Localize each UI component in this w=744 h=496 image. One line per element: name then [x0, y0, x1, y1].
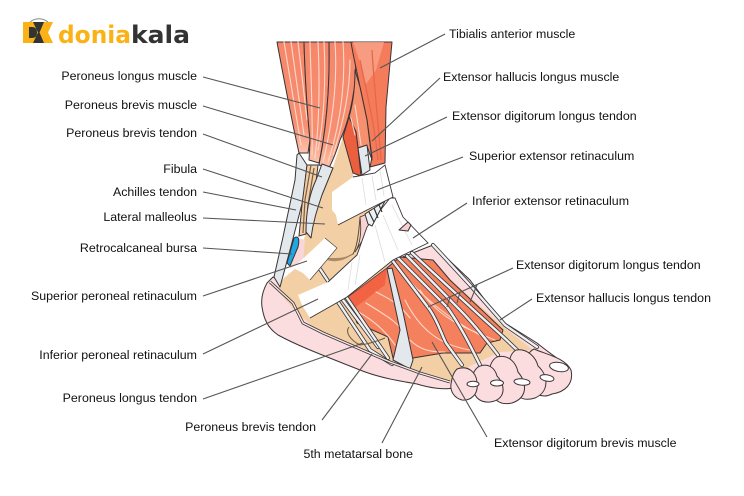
toes — [451, 349, 572, 404]
forefoot extensor tendons — [386, 245, 537, 365]
left labels — [31, 69, 422, 461]
toenails — [549, 361, 569, 373]
label: Inferior extensor retinaculum: Inferior extensor retinaculum — [472, 194, 629, 208]
label: Achilles tendon — [113, 185, 296, 210]
label: Fibula — [163, 162, 323, 208]
foot and ankle illustration — [31, 27, 711, 461]
label: Peroneus longus muscle — [61, 69, 320, 108]
label: Retrocalcaneal bursa: Retrocalcaneal bursa — [80, 241, 197, 255]
label: Extensor hallucis longus tendon: Extensor hallucis longus tendon — [536, 291, 711, 305]
label: Extensor digitorum longus tendon forefoot: Extensor digitorum longus tendon — [516, 258, 701, 272]
superior extensor retinaculum — [332, 165, 393, 225]
pink skin base of foot — [262, 245, 570, 389]
label: Extensor digitorum brevis muscle: Extensor digitorum brevis muscle — [494, 436, 677, 450]
pink sliver beside talus — [355, 212, 372, 252]
label: Peroneus brevis tendon lower: Peroneus brevis tendon — [185, 420, 316, 434]
label: 5th metatarsal bone: 5th metatarsal bone — [303, 447, 413, 461]
label: Lateral malleolus — [103, 210, 325, 224]
logo — [23, 19, 190, 49]
label: Peroneus brevis tendon: Peroneus brevis tendon — [66, 126, 197, 140]
label: 5th metatarsal bone — [303, 367, 422, 461]
deep red muscle — [343, 117, 361, 176]
label: Fibula: Fibula — [163, 162, 197, 176]
label: Achilles tendon: Achilles tendon — [113, 185, 197, 199]
label: Peroneus brevis muscle — [65, 98, 333, 145]
label: Peroneus longus muscle: Peroneus longus muscle — [61, 69, 197, 83]
extensor digitorum longus muscle — [349, 70, 372, 160]
little toe — [451, 368, 477, 400]
label: Tibialis anterior muscle — [380, 27, 575, 68]
label: Inferior peroneal retinaculum — [39, 299, 318, 362]
retrocalcaneal bursa — [287, 237, 299, 266]
label: Extensor hallucis longus muscle: Extensor hallucis longus muscle — [443, 70, 619, 84]
tan bone layer — [277, 137, 533, 381]
ankle gap tendons — [365, 201, 385, 226]
grey tendon wedge — [387, 268, 413, 369]
second toe — [509, 350, 546, 399]
logo: kala — [131, 21, 190, 49]
label: Tibialis anterior muscle: Tibialis anterior muscle — [449, 27, 575, 41]
right labels — [365, 27, 711, 450]
label: Peroneus longus tendon — [63, 343, 363, 405]
peroneal tendon bundle behind ankle — [299, 165, 318, 236]
label: Inferior extensor retinaculum — [413, 194, 629, 238]
label: Superior peroneal retinaculum: Superior peroneal retinaculum — [31, 289, 197, 303]
label: Peroneus brevis muscle: Peroneus brevis muscle — [65, 98, 197, 112]
achilles tendon — [274, 153, 307, 287]
label: Extensor hallucis longus muscle — [372, 70, 619, 141]
peroneus brevis muscle — [319, 42, 356, 168]
label: Superior extensor retinaculum: Superior extensor retinaculum — [469, 149, 634, 163]
label: Retrocalcaneal bursa — [80, 241, 292, 255]
tibialis anterior muscle — [351, 42, 392, 167]
label: Superior extensor retinaculum — [377, 149, 634, 190]
pink pad beside bursa — [290, 238, 305, 268]
label: Peroneus longus tendon: Peroneus longus tendon — [63, 391, 197, 405]
inferior extensor and peroneal retinaculum — [298, 198, 428, 318]
label: Lateral malleolus: Lateral malleolus — [103, 210, 197, 224]
superior peroneal retinaculum — [293, 238, 337, 280]
sole double line — [270, 282, 450, 382]
label: Extensor digitorum longus tendon — [365, 109, 637, 156]
label: Superior peroneal retinaculum — [31, 261, 307, 303]
label: Peroneus brevis tendon — [66, 126, 322, 177]
big toe — [525, 349, 572, 396]
logo: donia — [58, 21, 131, 49]
label: Extensor digitorum brevis muscle — [432, 342, 677, 450]
third toe — [489, 356, 525, 404]
extensor digitorum brevis muscle — [348, 257, 503, 366]
label: Extensor hallucis longus tendon — [500, 291, 711, 320]
label: Extensor digitorum longus tendon: Extensor digitorum longus tendon — [452, 109, 637, 123]
fourth toe — [473, 365, 503, 402]
label: Inferior peroneal retinaculum: Inferior peroneal retinaculum — [39, 348, 197, 362]
inferior retinaculum cutout — [399, 222, 411, 231]
peroneus longus muscle — [277, 42, 310, 153]
peroneal tendons at sole — [318, 266, 392, 364]
label: Extensor digitorum longus tendon forefoot — [428, 258, 701, 307]
extensor tendon under retinaculum — [358, 145, 370, 175]
label: Peroneus brevis tendon lower — [185, 354, 372, 434]
heel bone dome — [318, 217, 360, 260]
peroneus brevis lateral muscle — [304, 42, 329, 163]
peroneus brevis tendon — [306, 164, 333, 238]
muscle fibre highlights — [284, 42, 361, 162]
